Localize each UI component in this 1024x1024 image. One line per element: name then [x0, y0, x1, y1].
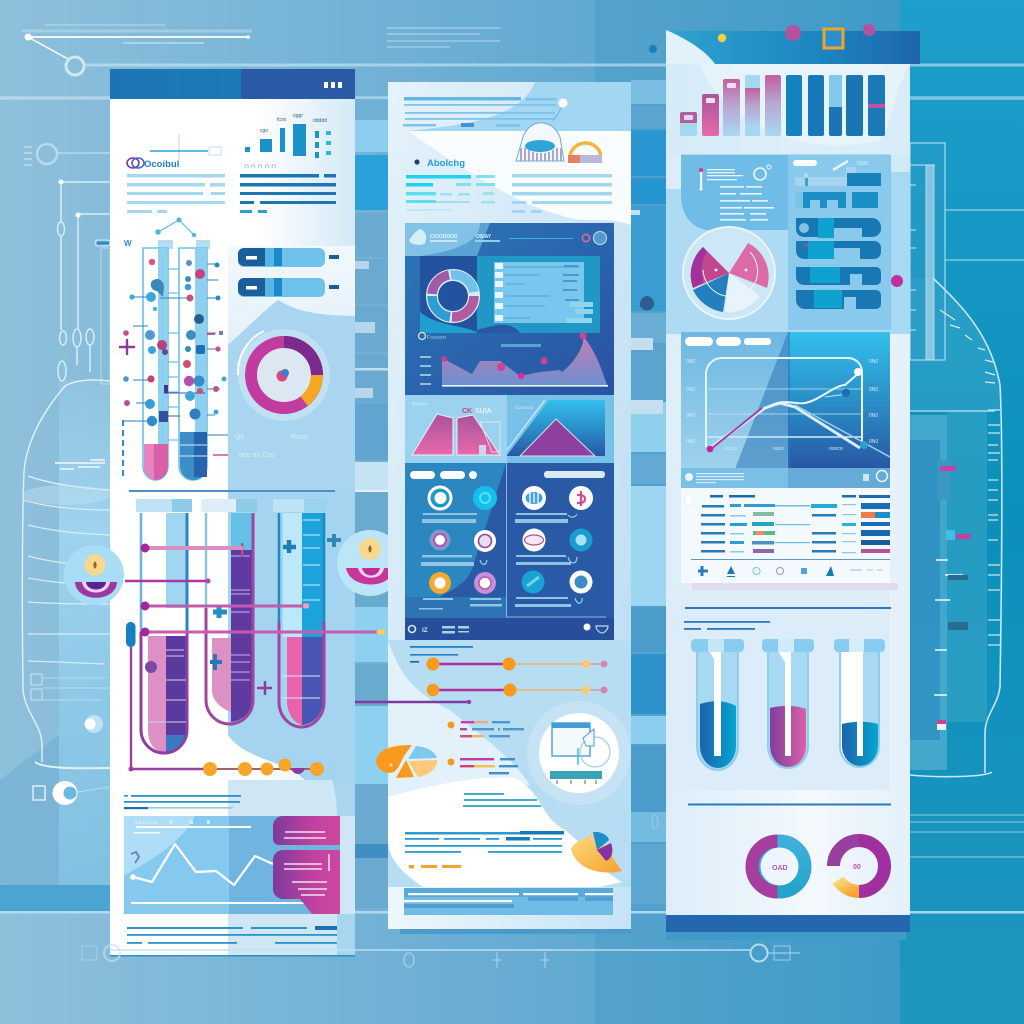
small white bubbles left	[52, 715, 103, 805]
left liquid top	[22, 485, 110, 505]
icon: half gauge	[568, 143, 602, 163]
right info stack	[788, 155, 903, 330]
card: mountain charts: Expooo	[412, 401, 428, 406]
right bottle contents	[910, 310, 1024, 857]
pill indicators	[238, 248, 339, 297]
donut teal purple: OAD	[772, 865, 788, 872]
panel: left	[110, 69, 386, 957]
tube blue 2	[834, 639, 885, 767]
lower test tube C	[257, 499, 341, 727]
line chart: cccco	[724, 446, 737, 452]
donut purple orange: 00	[853, 864, 861, 871]
rule above tubes	[684, 607, 891, 630]
inner donut card	[420, 256, 600, 333]
chart footer strip	[681, 468, 890, 488]
dashboard heading: OSIAY	[476, 234, 492, 240]
small pie chart	[571, 832, 622, 873]
footer row	[408, 624, 608, 634]
label W and network: W	[124, 239, 132, 248]
marker pin	[553, 98, 568, 121]
table icons	[698, 566, 883, 577]
line chart: 0N0	[686, 387, 695, 393]
line chart: 0N0	[869, 359, 878, 365]
right text block	[512, 174, 612, 213]
info card	[681, 155, 788, 230]
shadow under middle panel	[400, 929, 631, 934]
pie chart right	[683, 227, 775, 319]
cyan text block	[406, 175, 495, 211]
pale ramp lower left	[388, 640, 530, 805]
lower test tube A	[136, 499, 192, 753]
line chart: 0N0	[686, 359, 695, 365]
dashboard card	[405, 223, 614, 395]
line chart: oooco	[829, 446, 843, 452]
card: mountain charts	[405, 395, 614, 463]
donut purple orange	[834, 840, 884, 892]
magnifier circle	[527, 701, 631, 805]
text lines centre	[463, 793, 541, 807]
line chart: 0N0	[869, 413, 878, 419]
text block lower	[405, 831, 564, 868]
line chart: 0N0	[869, 439, 878, 445]
gauge donut: ooo ao Cco	[239, 452, 275, 459]
small axis mark	[150, 134, 221, 160]
line chart: ooco	[773, 446, 784, 452]
line chart card: mooooo oo	[135, 820, 158, 825]
middle heading: Abolchg	[427, 158, 465, 169]
panel header	[110, 69, 355, 99]
bar chart	[244, 113, 331, 170]
pie chart orange	[376, 745, 437, 778]
gauge donut	[235, 329, 330, 459]
card: mountain charts: Coooooo	[515, 405, 534, 410]
data table	[681, 488, 898, 590]
lower strip	[388, 887, 631, 929]
area chart	[418, 332, 608, 387]
card: mountain charts: CK	[462, 408, 472, 415]
callout circle left	[64, 545, 124, 605]
line chart card	[124, 816, 340, 914]
logo heading: Ocoibul	[144, 159, 179, 170]
donut teal purple	[752, 841, 805, 892]
test tube pair	[143, 240, 210, 480]
bottom baseline circuit	[82, 815, 800, 968]
tube blue 1	[691, 639, 744, 770]
bar chart: ddddd	[313, 118, 327, 124]
line chart: 0N0	[686, 439, 695, 445]
line chart	[681, 332, 890, 469]
label W and network	[124, 218, 196, 248]
header text lines	[403, 97, 556, 127]
footer block	[404, 888, 613, 915]
text block right	[240, 174, 336, 213]
panel: right	[649, 24, 920, 932]
icon circles	[429, 486, 593, 594]
top-left circuit lines	[0, 25, 1024, 98]
lower test tube B	[201, 499, 257, 724]
area chart: Foooorr	[427, 335, 446, 341]
bar chart: cgo	[260, 128, 268, 134]
line chart: 0N0	[869, 387, 878, 393]
dashboard heading	[409, 229, 606, 245]
channel blocks between left and middle panels	[355, 99, 388, 908]
header decoration	[649, 24, 875, 53]
icon: hill diagram	[516, 123, 564, 161]
bar chart: ဂ ဂ ဂ ဂ ဂ	[244, 161, 276, 170]
channel blocks between middle and right panels	[631, 80, 666, 904]
line chart: 0N0	[686, 413, 695, 419]
tube data points	[119, 259, 228, 477]
card: mountain charts: SUIA	[475, 408, 492, 415]
footer row: IZ	[422, 627, 428, 634]
bar chart: oggr	[293, 113, 303, 119]
lower panel base blue	[388, 640, 631, 887]
bar chart: fcoo	[277, 117, 287, 123]
gauge donut: Qb	[235, 434, 244, 441]
left tech diagram lines	[24, 144, 110, 384]
header band	[666, 31, 920, 64]
dashboard heading: CIOODDOD	[430, 234, 458, 240]
right bottle background	[910, 143, 1024, 777]
right info stack: 0100	[857, 161, 868, 167]
header light blue shape	[408, 82, 631, 131]
bar chart top	[680, 75, 885, 136]
bottom text lines top	[124, 795, 241, 809]
icon labels	[419, 513, 582, 610]
connector lines and orange nodes	[125, 544, 386, 776]
tube magenta	[762, 639, 814, 768]
timeline rows	[355, 646, 608, 704]
left flask outline	[22, 380, 110, 800]
divider line top of lower tubes	[129, 490, 335, 492]
text block left	[127, 174, 225, 213]
pills row	[410, 471, 605, 479]
callout circle right	[337, 530, 403, 596]
shadow under right panel	[666, 932, 906, 940]
gauge donut: Rann	[291, 434, 308, 441]
bottom band	[666, 915, 910, 932]
bottom text lines	[110, 926, 355, 957]
white wave lower	[388, 777, 622, 887]
card: icon grid	[405, 463, 614, 640]
panel: middle	[355, 82, 631, 929]
legend lines	[448, 721, 524, 774]
rule above donuts	[688, 804, 891, 806]
blue background shapes	[228, 246, 355, 490]
logo heading	[127, 158, 179, 170]
